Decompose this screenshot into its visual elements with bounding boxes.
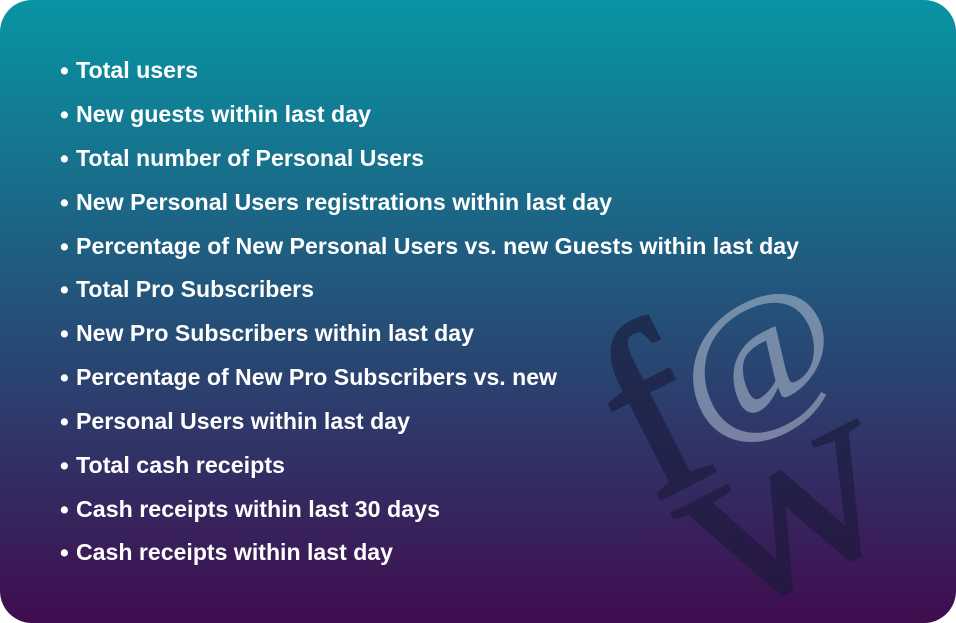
list item: • — [60, 496, 69, 524]
list item: • — [60, 101, 69, 129]
list item: • — [60, 320, 69, 348]
list item: Total Pro Subscribers — [76, 276, 314, 302]
logo watermark — [554, 242, 940, 623]
list item: • — [60, 233, 69, 261]
list item: • — [60, 145, 69, 173]
list item: • — [60, 452, 69, 480]
list item: Personal Users within last day — [76, 408, 410, 434]
list item: New guests within last day — [76, 101, 371, 127]
list item: Percentage of New Pro Subscribers vs. new — [76, 364, 557, 390]
logo letter f: f — [554, 275, 748, 550]
logo at sign: @ — [643, 242, 868, 471]
list item: Total users — [76, 57, 198, 83]
list item: Cash receipts within last day — [76, 539, 393, 565]
list item: Total number of Personal Users — [76, 145, 424, 171]
list item: • — [60, 364, 69, 392]
list item: • — [60, 539, 69, 567]
list item: • — [60, 57, 69, 85]
list item: • — [60, 276, 69, 304]
list item: Cash receipts within last 30 days — [76, 496, 440, 522]
list item: • — [60, 189, 69, 217]
list item: Percentage of New Personal Users vs. new Guests within last day — [76, 233, 799, 259]
metrics bullet list — [60, 57, 799, 567]
list item: Total cash receipts — [76, 452, 285, 478]
list item: New Pro Subscribers within last day — [76, 320, 474, 346]
list item: New Personal Users registrations within last day — [76, 189, 612, 215]
list item: • — [60, 408, 69, 436]
